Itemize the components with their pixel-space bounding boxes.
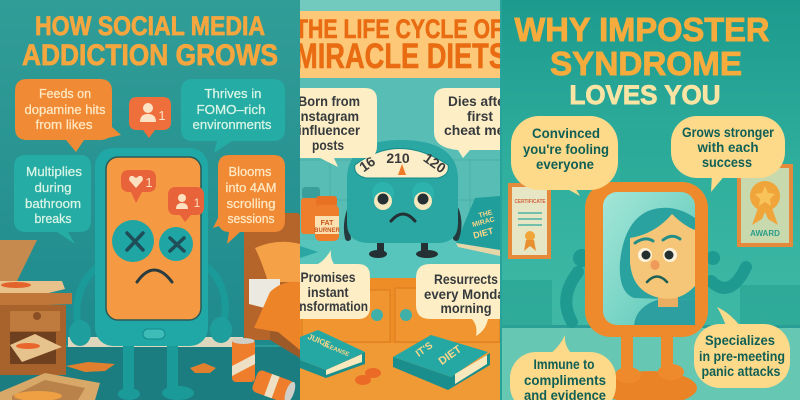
bubble: promises instant transformation bbox=[284, 250, 370, 319]
bubble: feeds on dopamine: from likes bbox=[36, 117, 93, 132]
title: WHY IMPOSTER bbox=[514, 11, 770, 48]
panel: why imposter syndrome loves you bbox=[502, 0, 800, 400]
shirt bbox=[634, 299, 695, 325]
mirror glass bbox=[603, 192, 695, 325]
title bbox=[514, 11, 770, 110]
legs and feet bbox=[615, 332, 684, 383]
badge: heart like: 1 bbox=[145, 175, 153, 190]
mirror frame bbox=[585, 182, 708, 337]
dial numbers: 120 bbox=[421, 150, 449, 176]
bubble: immune to compliments and evidence: Immune to bbox=[534, 356, 594, 372]
weight scale character bbox=[347, 140, 458, 258]
panel: the life cycle of miracle diets bbox=[300, 0, 500, 400]
bubble: multiplies during bathroom breaks bbox=[14, 155, 91, 244]
bubble: dies after first cheat meal: Dies after bbox=[448, 93, 511, 109]
fat burner bottle bbox=[314, 196, 340, 241]
certificate frame bbox=[508, 183, 551, 259]
title: LOVES YOU bbox=[570, 80, 720, 110]
bubble: thrives in FOMO: environments bbox=[192, 117, 272, 132]
dial numbers bbox=[356, 150, 449, 176]
bubble: specializes in pre-meeting panic attacks: Specializes bbox=[705, 332, 775, 348]
hands bbox=[69, 317, 232, 346]
bubble: specializes in pre-meeting panic attacks: panic attacks bbox=[702, 363, 781, 379]
left shoulder ball bbox=[573, 249, 591, 267]
title: SYNDROME bbox=[550, 45, 742, 82]
bubble: born from instagram bbox=[297, 88, 377, 167]
fad diet book bbox=[393, 335, 490, 390]
juice cleanse book: JUICE bbox=[306, 332, 332, 350]
left arm bbox=[566, 272, 578, 322]
fat burner bottle: BURNER bbox=[314, 228, 340, 234]
bubble: grows stronger with each success: with each bbox=[697, 139, 758, 155]
eye right x bbox=[159, 227, 193, 261]
back wall panelling bbox=[502, 128, 800, 336]
home button bbox=[143, 329, 165, 339]
face bbox=[630, 214, 695, 299]
eye left x bbox=[112, 220, 154, 262]
award frame: AWARD bbox=[750, 229, 780, 238]
panel: how social media addiction grows bbox=[0, 0, 300, 400]
bubble: multiplies during bathroom breaks: during bbox=[34, 180, 72, 195]
wall background bbox=[300, 78, 500, 242]
bubble: thrives in FOMO bbox=[181, 79, 285, 153]
title banner: THE LIFE CYCLE OF bbox=[295, 14, 503, 44]
bubble: immune to compliments and evidence bbox=[510, 335, 616, 400]
top wall highlight bbox=[300, 0, 500, 11]
fad diet book: DIET bbox=[437, 343, 464, 368]
sad mouth bbox=[137, 270, 172, 282]
bubble: born from instagram: influencer bbox=[298, 122, 361, 138]
bubble: blooms into 4AM: Blooms bbox=[228, 164, 272, 179]
badge: follower notification: 1 bbox=[158, 108, 166, 123]
floor bbox=[300, 343, 500, 400]
scale body bbox=[347, 140, 458, 243]
neck bbox=[658, 290, 678, 307]
spilled crumbs bbox=[66, 362, 216, 373]
floor bbox=[502, 328, 800, 400]
wall background bbox=[0, 147, 300, 345]
badge: person: 1 bbox=[194, 196, 201, 210]
title banner bbox=[295, 11, 507, 78]
badge: follower notification bbox=[129, 97, 171, 138]
bubble: resurrects every monday morning: morning bbox=[440, 300, 492, 316]
award frame bbox=[737, 164, 793, 247]
bubble: promises instant transformation: transformation bbox=[284, 298, 368, 314]
bubble: blooms into 4AM: into 4AM bbox=[226, 180, 276, 195]
soda cans bbox=[232, 338, 297, 400]
base bbox=[603, 371, 697, 400]
panel divider strip bbox=[500, 0, 502, 400]
miracle diet book on counter bbox=[456, 196, 500, 256]
bubble: promises instant transformation: instant bbox=[308, 284, 349, 300]
cabinets bbox=[300, 278, 500, 344]
bubble: multiplies during bathroom breaks: bathroom bbox=[25, 196, 81, 211]
bubble: born from instagram: Born from bbox=[298, 93, 360, 109]
right shoulder ball bbox=[706, 251, 720, 265]
loose pills bbox=[355, 368, 381, 385]
bed bbox=[244, 213, 300, 358]
bubble: resurrects every monday morning bbox=[416, 264, 512, 336]
bubble: specializes in pre-meeting panic attacks bbox=[694, 307, 790, 388]
bubble: immune to compliments and evidence: compliments bbox=[524, 372, 606, 388]
bubble: promises instant transformation: Promises bbox=[300, 269, 356, 285]
scale feet bbox=[369, 243, 438, 258]
counter top bbox=[300, 260, 500, 278]
scale arms bbox=[347, 210, 458, 238]
miracle diet book on counter: THE bbox=[478, 209, 494, 220]
nightstand with pizza boxes bbox=[0, 240, 72, 375]
bubble: blooms into 4AM: sessions bbox=[228, 211, 275, 226]
small book on counter bbox=[300, 246, 318, 258]
bubble: grows stronger with each success: Grows stronger bbox=[682, 124, 774, 140]
juice cleanse book: CLEANSE bbox=[321, 342, 350, 358]
floor pizza box bbox=[0, 373, 100, 400]
dial needle bbox=[398, 164, 406, 175]
bubble: thrives in FOMO: FOMO–rich bbox=[196, 102, 266, 117]
badge: person bbox=[168, 187, 204, 222]
bubble: convinced you're fooling everyone bbox=[511, 116, 618, 196]
bubble: born from instagram: posts bbox=[312, 137, 344, 153]
certificate frame: CERTIFICATE bbox=[514, 199, 546, 205]
title banner: MIRACLE DIETS bbox=[295, 37, 507, 76]
hair bbox=[620, 208, 695, 300]
bubble: convinced you're fooling everyone: Convinced bbox=[532, 125, 600, 141]
arms bbox=[77, 268, 225, 325]
bubble: dies after first cheat meal: first bbox=[467, 108, 493, 124]
scale mouth bbox=[391, 214, 415, 221]
nose bbox=[650, 260, 660, 270]
screen bbox=[106, 157, 201, 320]
bubble: multiplies during bathroom breaks: Multiplies bbox=[26, 164, 83, 179]
bubble: grows stronger with each success: success bbox=[702, 154, 752, 170]
bubble: feeds on dopamine: dopamine hits bbox=[24, 102, 106, 117]
floor bbox=[0, 347, 300, 400]
dial bbox=[355, 148, 448, 178]
right arm bbox=[711, 267, 746, 288]
scale eyes bbox=[372, 182, 434, 210]
baseboard bbox=[68, 337, 243, 348]
juice cleanse book bbox=[300, 330, 365, 378]
miracle diet book on counter: DIET bbox=[472, 225, 495, 241]
bubble: dies after first cheat meal: cheat meal bbox=[444, 122, 516, 138]
bubble: resurrects every monday morning: every Monday bbox=[424, 286, 512, 302]
dial numbers: 210 bbox=[386, 150, 410, 166]
fat burner bottle: FAT bbox=[321, 220, 334, 227]
bubble: feeds on dopamine bbox=[15, 79, 121, 152]
bubble: born from instagram: Instagram bbox=[297, 108, 359, 124]
miracle diet book on counter: MIRAC bbox=[472, 216, 496, 229]
badge: heart like bbox=[121, 170, 156, 203]
bubble: dies after first cheat meal bbox=[434, 88, 516, 158]
bubble: feeds on dopamine: Feeds on bbox=[39, 86, 91, 101]
bubble: multiplies during bathroom breaks: breaks bbox=[34, 211, 72, 226]
bubble: grows stronger with each success bbox=[671, 116, 785, 192]
bubble: resurrects every monday morning: Resurrects bbox=[434, 271, 498, 287]
fad diet book: IT'S bbox=[414, 340, 435, 360]
bubble: specializes in pre-meeting panic attacks: in pre-meeting bbox=[699, 348, 785, 364]
mirror character bbox=[566, 182, 746, 400]
wall background bbox=[502, 0, 800, 325]
phone body bbox=[95, 148, 208, 346]
title: ADDICTION GROWS bbox=[22, 39, 278, 72]
title bbox=[22, 16, 278, 66]
reflected woman bbox=[620, 208, 695, 325]
bubble: blooms into 4AM: scrolling bbox=[226, 196, 276, 211]
title: HOW SOCIAL MEDIA bbox=[35, 11, 265, 41]
bubble: thrives in FOMO: Thrives in bbox=[204, 86, 262, 101]
eyes bbox=[638, 248, 677, 262]
legs bbox=[118, 340, 194, 400]
brows bbox=[635, 236, 680, 243]
dial numbers: 16 bbox=[356, 153, 378, 175]
rear supplement bottle bbox=[301, 187, 321, 234]
mouth bbox=[647, 276, 667, 282]
bubble: convinced you're fooling everyone: you're fooling bbox=[523, 141, 609, 157]
bubble: blooms into 4AM bbox=[213, 155, 285, 244]
phone character bbox=[69, 148, 232, 400]
bubble: convinced you're fooling everyone: everyone bbox=[536, 156, 594, 172]
